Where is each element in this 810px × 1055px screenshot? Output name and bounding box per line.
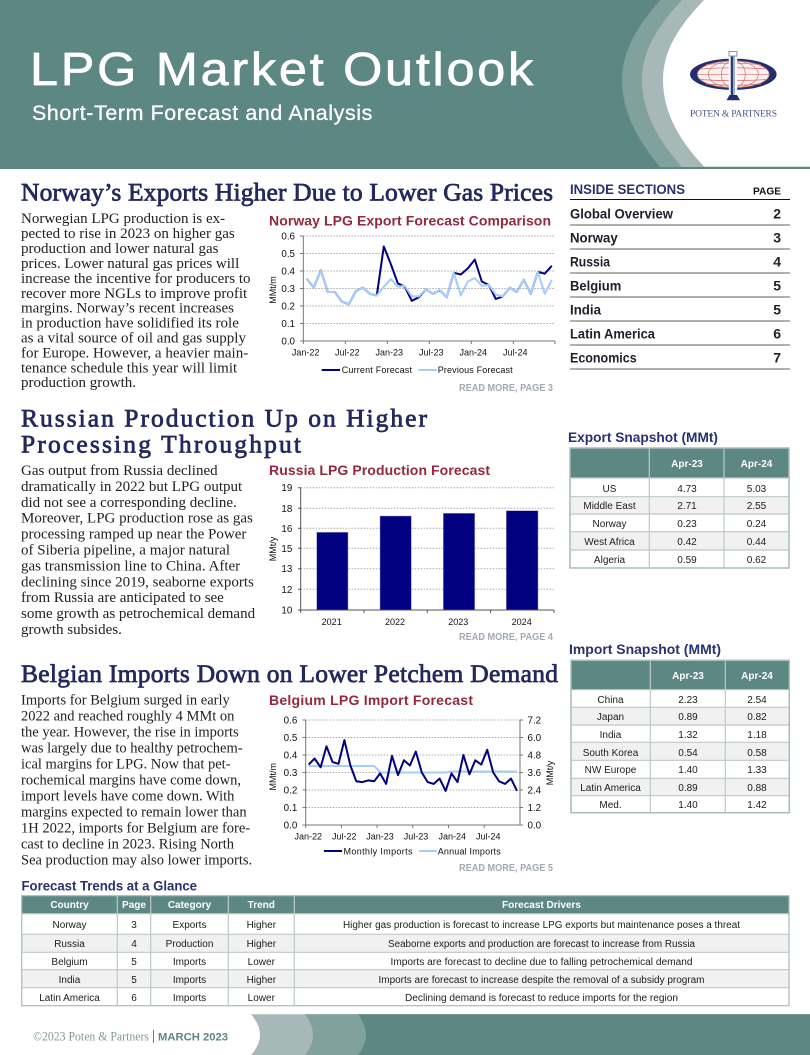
footer text: ©2023 Poten & Partners	[33, 1030, 149, 1044]
text block: Belgium: 1H 2022, imports for Belgium are fore-	[21, 820, 250, 836]
text block: Norway: margins. Norway’s recent increases	[21, 300, 234, 316]
text block: Russia: some growth as petrochemical demand	[21, 606, 256, 622]
text block: Russia: from Russia are anticipated to see	[21, 590, 224, 606]
line chart: Belgium LPG imports: 6.0	[528, 733, 542, 744]
logo: Poten & Partners: POTEN & PARTNERS	[690, 110, 777, 120]
text block: Russia: dramatically in 2022 but LPG output	[21, 479, 243, 495]
table: forecast trends: Imports	[173, 957, 206, 968]
table: forecast trends: Latin America	[39, 993, 100, 1004]
bar chart: Russia LPG production: 2024	[512, 617, 532, 627]
line chart: Norway LPG exports: 0.5	[281, 249, 296, 260]
table: import snapshot: 1.18	[747, 730, 767, 741]
text block: Belgium: rochemical margins have come down,	[21, 772, 241, 788]
line chart: Norway LPG exports: Jul-24	[503, 348, 528, 358]
subtitle: Short-Term Forecast and Analysis	[32, 102, 373, 125]
read more: page 5: READ MORE, PAGE 5	[459, 863, 553, 874]
text block: Norway	[21, 211, 250, 391]
legend: Belgium	[324, 846, 501, 856]
table of contents: 4	[773, 253, 781, 269]
title: LPG Market Outlook	[30, 43, 536, 95]
bar chart: Russia LPG production: MMt/y	[268, 536, 278, 561]
table: import snapshot: China	[597, 695, 624, 706]
table: export snapshot: 0.42	[677, 537, 697, 548]
line chart: Belgium LPG imports: 1.2	[528, 803, 541, 814]
table of contents: 2	[773, 205, 781, 221]
text block: Russia: gas transmission line to China. After	[21, 558, 240, 574]
text block: Belgium: cast to decline in 2023. Rising North	[21, 836, 235, 852]
table: forecast trends: Country	[50, 900, 89, 911]
table of contents: PAGE	[753, 186, 781, 198]
line chart: Norway LPG exports: Jan-23	[376, 348, 403, 358]
table of contents: Latin America	[570, 325, 655, 341]
line chart: Norway LPG exports: Jan-22	[292, 348, 319, 358]
legend: Belgium: Monthly Imports	[344, 846, 413, 856]
table: import snapshot: 0.58	[747, 748, 767, 759]
table: forecast trends: Imports	[173, 975, 206, 986]
table: export snapshot: 2.71	[677, 501, 697, 512]
line chart: Belgium LPG imports: Jul-24	[476, 832, 501, 842]
table: export snapshot: Norway	[593, 519, 626, 530]
line chart: Belgium LPG imports: 0.5	[284, 733, 298, 744]
table: forecast trends: Belgium	[51, 957, 88, 968]
table: forecast trends: Imports are forecast to decline due to falling petrochemical demand	[390, 957, 692, 968]
read more: page 4: READ MORE, PAGE 4	[459, 632, 553, 643]
table: import snapshot: Apr-24	[741, 671, 773, 682]
table of contents: Global Overview	[570, 205, 673, 221]
table: forecast trends: 6	[131, 993, 137, 1004]
bar chart: Russia LPG production: 16	[281, 524, 293, 535]
table: import snapshot: 1.32	[678, 730, 698, 741]
table: export snapshot: 0.44	[747, 537, 767, 548]
text block: Russia	[21, 463, 256, 638]
line chart: Belgium LPG imports: Jul-22	[332, 832, 357, 842]
table: import snapshot: 1.42	[747, 800, 767, 811]
bar chart: Russia LPG production: 18	[281, 504, 293, 515]
table: import snapshot: 2.23	[678, 695, 698, 706]
line chart: Belgium LPG imports: Jan-24	[439, 832, 466, 842]
line chart: Norway LPG exports: 0.4	[281, 266, 296, 278]
table of contents: India	[570, 301, 601, 317]
text block: Russia: declining since 2019, seaborne exports	[21, 574, 254, 590]
line chart: Belgium LPG imports: Jan-23	[366, 832, 394, 842]
text block: Norway: Norwegian LPG production is ex-	[21, 211, 225, 227]
line chart: Belgium LPG imports: 3.6	[528, 768, 542, 779]
table: forecast trends: Imports are forecast to increase despite the removal of a subsidy program	[378, 975, 704, 986]
table: forecast trends: Seaborne exports and production are forecast to increase from Russia	[388, 939, 695, 950]
line chart: Norway LPG exports: 0.6	[281, 232, 296, 242]
table: forecast trends: Higher gas production is forecast to increase LPG exports but maintenance poses a threat	[343, 920, 740, 931]
line chart: Belgium LPG imports: 0.2	[284, 786, 297, 796]
bar chart: Russia LPG production: 2022	[385, 617, 405, 627]
table of contents: 5	[773, 277, 781, 293]
table: export snapshot: West Africa	[584, 537, 635, 548]
table of contents: Belgium	[570, 277, 621, 293]
table: import snapshot: 0.88	[747, 783, 767, 794]
table: forecast trends	[22, 896, 789, 1006]
table: import snapshot: Latin America	[580, 783, 641, 794]
table: import snapshot	[571, 660, 789, 813]
bar chart: Russia LPG production: 13	[281, 564, 293, 575]
table of contents: 6	[773, 325, 781, 341]
line chart: Norway LPG exports: 0.1	[281, 319, 295, 330]
line chart: Belgium LPG imports: Jul-23	[404, 832, 428, 842]
export snapshot heading: Export Snapshot (MMt)	[568, 429, 718, 445]
line chart: Belgium LPG imports: 0.4	[284, 750, 298, 762]
header banner	[0, 0, 810, 169]
table: export snapshot: 0.62	[747, 555, 767, 566]
line chart: Norway LPG exports: 0.3	[281, 284, 296, 295]
text block: Russia: processing ramped up near the Power	[21, 527, 246, 543]
legend: Belgium: Annual Imports	[438, 846, 501, 856]
table: export snapshot: 5.03	[747, 484, 767, 495]
line chart: Belgium LPG imports: 4.8	[528, 750, 542, 762]
text block: Russia: Moreover, LPG production rose as gas	[21, 511, 253, 527]
table: export snapshot: US	[603, 484, 617, 495]
line chart: Norway LPG exports: Jul-23	[419, 348, 444, 358]
bar chart: Russia LPG production	[268, 483, 554, 627]
table: forecast trends: 3	[131, 920, 137, 931]
line chart: Norway LPG exports: 0.2	[281, 302, 295, 312]
table: export snapshot: Middle East	[583, 501, 636, 512]
table: import snapshot: 0.54	[678, 748, 698, 759]
text block: Norway: production growth.	[21, 375, 136, 391]
text block: Norway: increase the incentive for producers to	[21, 271, 250, 287]
table of contents: 3	[773, 229, 781, 245]
text block: Belgium: import levels have come down. With	[21, 788, 235, 804]
text block: Norway: pected to rise in 2023 on higher gas	[21, 226, 235, 242]
legend: Norway: Current Forecast	[342, 365, 412, 375]
bar chart: Russia LPG production: 15	[281, 544, 293, 555]
heading: Russia: Russian Production Up on Higher	[21, 404, 427, 433]
line chart: Norway LPG exports: 0.0	[281, 336, 296, 348]
text block: Belgium: the year. However, the rise in imports	[21, 724, 239, 740]
table: export snapshot: Algeria	[594, 555, 625, 566]
table of contents: 5	[773, 301, 781, 317]
table: export snapshot: 2.55	[747, 501, 767, 512]
table: export snapshot: 0.59	[677, 555, 697, 566]
text block: Norway: in production have solidified its role	[21, 316, 239, 332]
line chart: Belgium LPG imports: 0.0	[528, 820, 542, 832]
chart title: Norway: Norway LPG Export Forecast Comparison	[269, 213, 551, 229]
chart title: Belgium: Belgium LPG Import Forecast	[269, 692, 473, 708]
line chart: Belgium LPG imports	[268, 716, 555, 856]
line chart: Belgium LPG imports: 0.1	[284, 803, 297, 814]
table: export snapshot: 0.23	[677, 519, 697, 530]
text block: Belgium: ical margins for LPG. Now that pet-	[21, 756, 231, 772]
line chart: Norway LPG exports: Jul-22	[335, 348, 360, 358]
table: forecast trends: Page	[122, 900, 146, 911]
line chart: Belgium LPG imports: MMt/y	[545, 760, 555, 785]
line chart: Belgium LPG imports: Jan-22	[295, 832, 322, 842]
line chart: Norway LPG exports	[268, 232, 555, 375]
table: import snapshot: 0.89	[678, 712, 698, 723]
line chart: Norway LPG exports: Jan-24	[460, 348, 487, 358]
table: export snapshot: 0.24	[747, 519, 767, 530]
table: forecast trends: Lower	[248, 957, 276, 968]
legend: Norway: Previous Forecast	[438, 365, 513, 375]
table: export snapshot: 4.73	[677, 484, 697, 495]
line chart: Belgium LPG imports: 0.6	[284, 716, 298, 726]
text block: Belgium: margins expected to remain lower than	[21, 804, 247, 820]
table of contents: Economics	[570, 349, 637, 365]
table: import snapshot: 1.40	[678, 765, 698, 776]
text block: Norway: for Europe. However, a heavier main-	[21, 346, 248, 362]
import snapshot heading: Import Snapshot (MMt)	[569, 641, 721, 657]
table: forecast trends: Higher	[247, 939, 277, 950]
line chart: Belgium LPG imports: 0.0	[284, 820, 298, 832]
table: import snapshot: Apr-23	[672, 671, 704, 682]
table: import snapshot: Med.	[599, 800, 622, 811]
bar chart: Russia LPG production: 2023	[448, 617, 468, 627]
text block: Belgium: Imports for Belgium surged in early	[21, 692, 230, 708]
table: import snapshot: 0.89	[678, 783, 698, 794]
text block: Russia: Gas output from Russia declined	[21, 463, 218, 479]
table: forecast trends: Higher	[247, 920, 277, 931]
table: forecast trends: Forecast Drivers	[502, 900, 581, 911]
table: import snapshot: South Korea	[583, 748, 639, 759]
table: forecast trends: Exports	[173, 920, 206, 931]
line chart: Belgium LPG imports: 2.4	[528, 786, 542, 796]
text block: Belgium: Sea production may also lower imports.	[21, 852, 252, 868]
table: forecast trends: Russia	[54, 939, 85, 950]
table of contents: Russia	[570, 253, 610, 269]
table: forecast trends: 4	[131, 939, 137, 950]
table of contents: Norway	[570, 229, 618, 245]
forecast trends heading: Forecast Trends at a Glance	[22, 878, 197, 894]
table: import snapshot: 1.33	[747, 765, 767, 776]
table: forecast trends: 5	[131, 975, 137, 986]
table of contents: 7	[773, 349, 781, 365]
text block: Norway: production and lower natural gas	[21, 241, 219, 257]
logo: Poten & Partners	[690, 52, 777, 120]
table: forecast trends: Lower	[248, 993, 276, 1004]
table: forecast trends: Category	[168, 900, 212, 911]
table: forecast trends: Imports	[173, 993, 206, 1004]
text block: Russia: of Siberia pipeline, a major natural	[21, 542, 230, 558]
line chart: Belgium LPG imports: 0.3	[284, 768, 298, 779]
footer text	[33, 1030, 228, 1044]
bar chart: Russia LPG production: 19	[281, 483, 292, 494]
bar chart: Russia LPG production: 12	[281, 585, 292, 596]
table: forecast trends: 5	[131, 957, 137, 968]
bar chart: Russia LPG production: 2021	[322, 617, 342, 627]
table of contents: INSIDE SECTIONS	[570, 181, 685, 197]
text block: Norway: as a vital source of oil and gas supply	[21, 330, 246, 346]
bar chart: Russia LPG production: 10	[281, 606, 293, 616]
table: forecast trends: Declining demand is forecast to reduce imports for the region	[405, 993, 678, 1004]
text block: Norway: prices. Lower natural gas prices will	[21, 256, 239, 272]
table: import snapshot: 0.82	[747, 712, 767, 723]
table: export snapshot: Apr-24	[741, 459, 773, 470]
table: forecast trends: India	[59, 975, 81, 986]
text block: Russia: did not see a corresponding decline.	[21, 495, 237, 511]
table: export snapshot: Apr-23	[671, 459, 703, 470]
table: import snapshot: NW Europe	[585, 765, 637, 776]
text block: Belgium: was largely due to healthy petrochem-	[21, 740, 243, 756]
table: import snapshot: 2.54	[747, 695, 767, 706]
chart title: Russia: Russia LPG Production Forecast	[269, 462, 490, 478]
heading: Belgium: Belgian Imports Down on Lower Petchem Demand	[21, 659, 558, 688]
footer text: MARCH 2023	[158, 1032, 228, 1044]
table: forecast trends: Higher	[247, 975, 277, 986]
table of contents	[570, 181, 790, 369]
table: forecast trends: Trend	[248, 900, 275, 911]
text block: Norway: recover more NGLs to improve profit	[21, 286, 248, 302]
table: forecast trends: Production	[166, 939, 213, 950]
table: export snapshot	[570, 448, 789, 568]
text block: Russia: growth subsides.	[21, 622, 122, 638]
heading: Russia	[21, 404, 427, 458]
line chart: Belgium LPG imports: MMt/m	[268, 763, 278, 790]
text block: Belgium	[21, 692, 252, 868]
read more: page 3: READ MORE, PAGE 3	[459, 383, 553, 394]
text block: Norway: tenance schedule this year will limit	[21, 360, 238, 376]
heading: Russia: Processing Throughput	[21, 429, 301, 458]
table: import snapshot: India	[600, 730, 622, 741]
table: forecast trends: Norway	[53, 920, 86, 931]
line chart: Norway LPG exports: MMt/m	[268, 276, 278, 304]
legend: Norway	[322, 365, 513, 375]
heading: Norway: Norway’s Exports Higher Due to Lower Gas Prices	[21, 178, 553, 206]
table: import snapshot: Japan	[597, 712, 624, 723]
table: import snapshot: 1.40	[678, 800, 698, 811]
text block: Belgium: 2022 and reached roughly 4 MMt on	[21, 708, 235, 724]
line chart: Belgium LPG imports: 7.2	[528, 716, 541, 726]
footer band	[33, 1014, 810, 1055]
